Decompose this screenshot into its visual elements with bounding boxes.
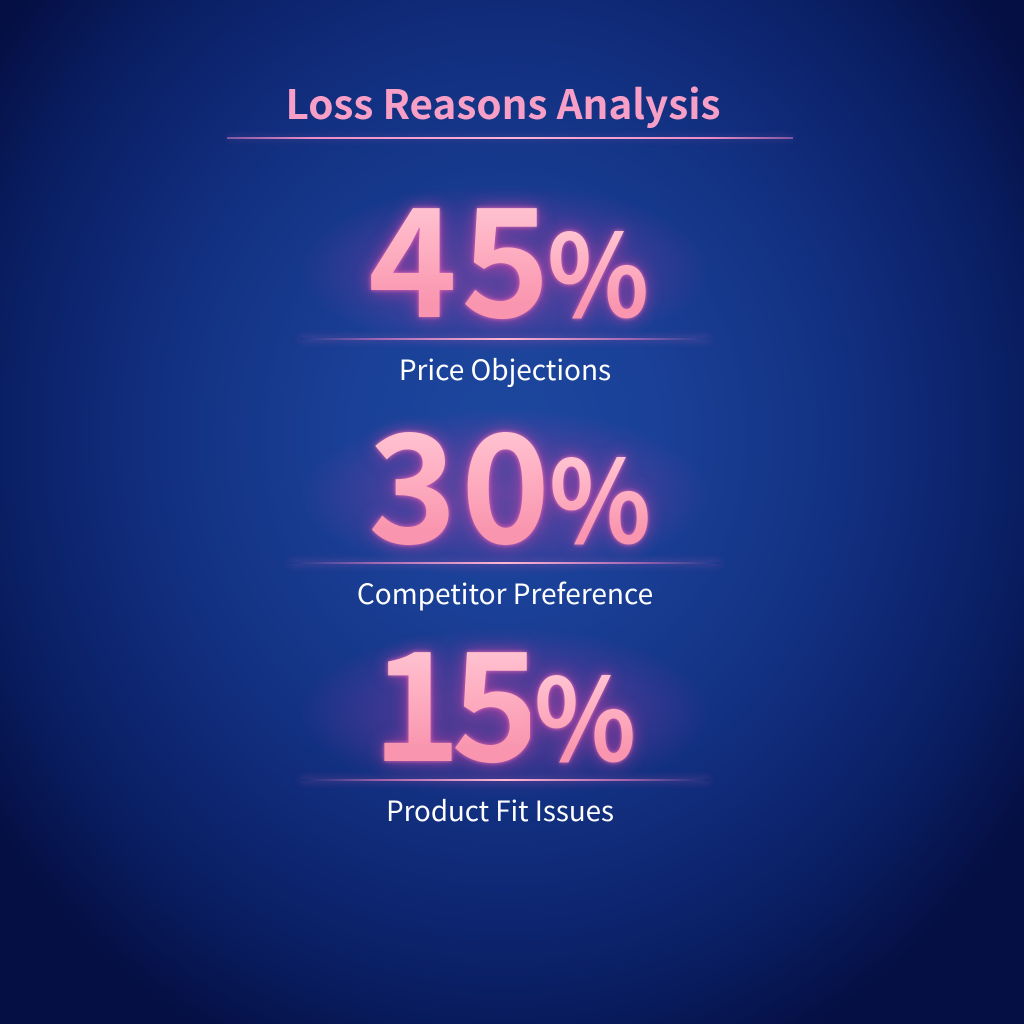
stat: 30% competitor preference xyxy=(288,369,722,613)
value 45: 45 xyxy=(368,143,554,361)
value 30 xyxy=(368,403,554,554)
label: Product Fit Issues xyxy=(386,789,614,829)
percent sign xyxy=(547,211,649,325)
stat: 45% price objections xyxy=(298,143,712,389)
title: Loss Reasons Analysis xyxy=(286,72,720,131)
percent sign xyxy=(534,655,636,769)
percent sign: % xyxy=(547,185,649,350)
percent sign: % xyxy=(534,629,636,794)
value 15 xyxy=(372,621,530,772)
label: Price Objections xyxy=(399,349,611,389)
value 30: 30 xyxy=(368,369,554,587)
title divider xyxy=(227,137,793,139)
percent sign: % xyxy=(549,411,651,576)
stat: 15% product fit issues xyxy=(298,587,712,829)
value 45 xyxy=(368,177,554,328)
percent sign xyxy=(549,437,651,551)
label: Competitor Preference xyxy=(357,573,653,613)
value 15: 15 xyxy=(372,587,530,805)
